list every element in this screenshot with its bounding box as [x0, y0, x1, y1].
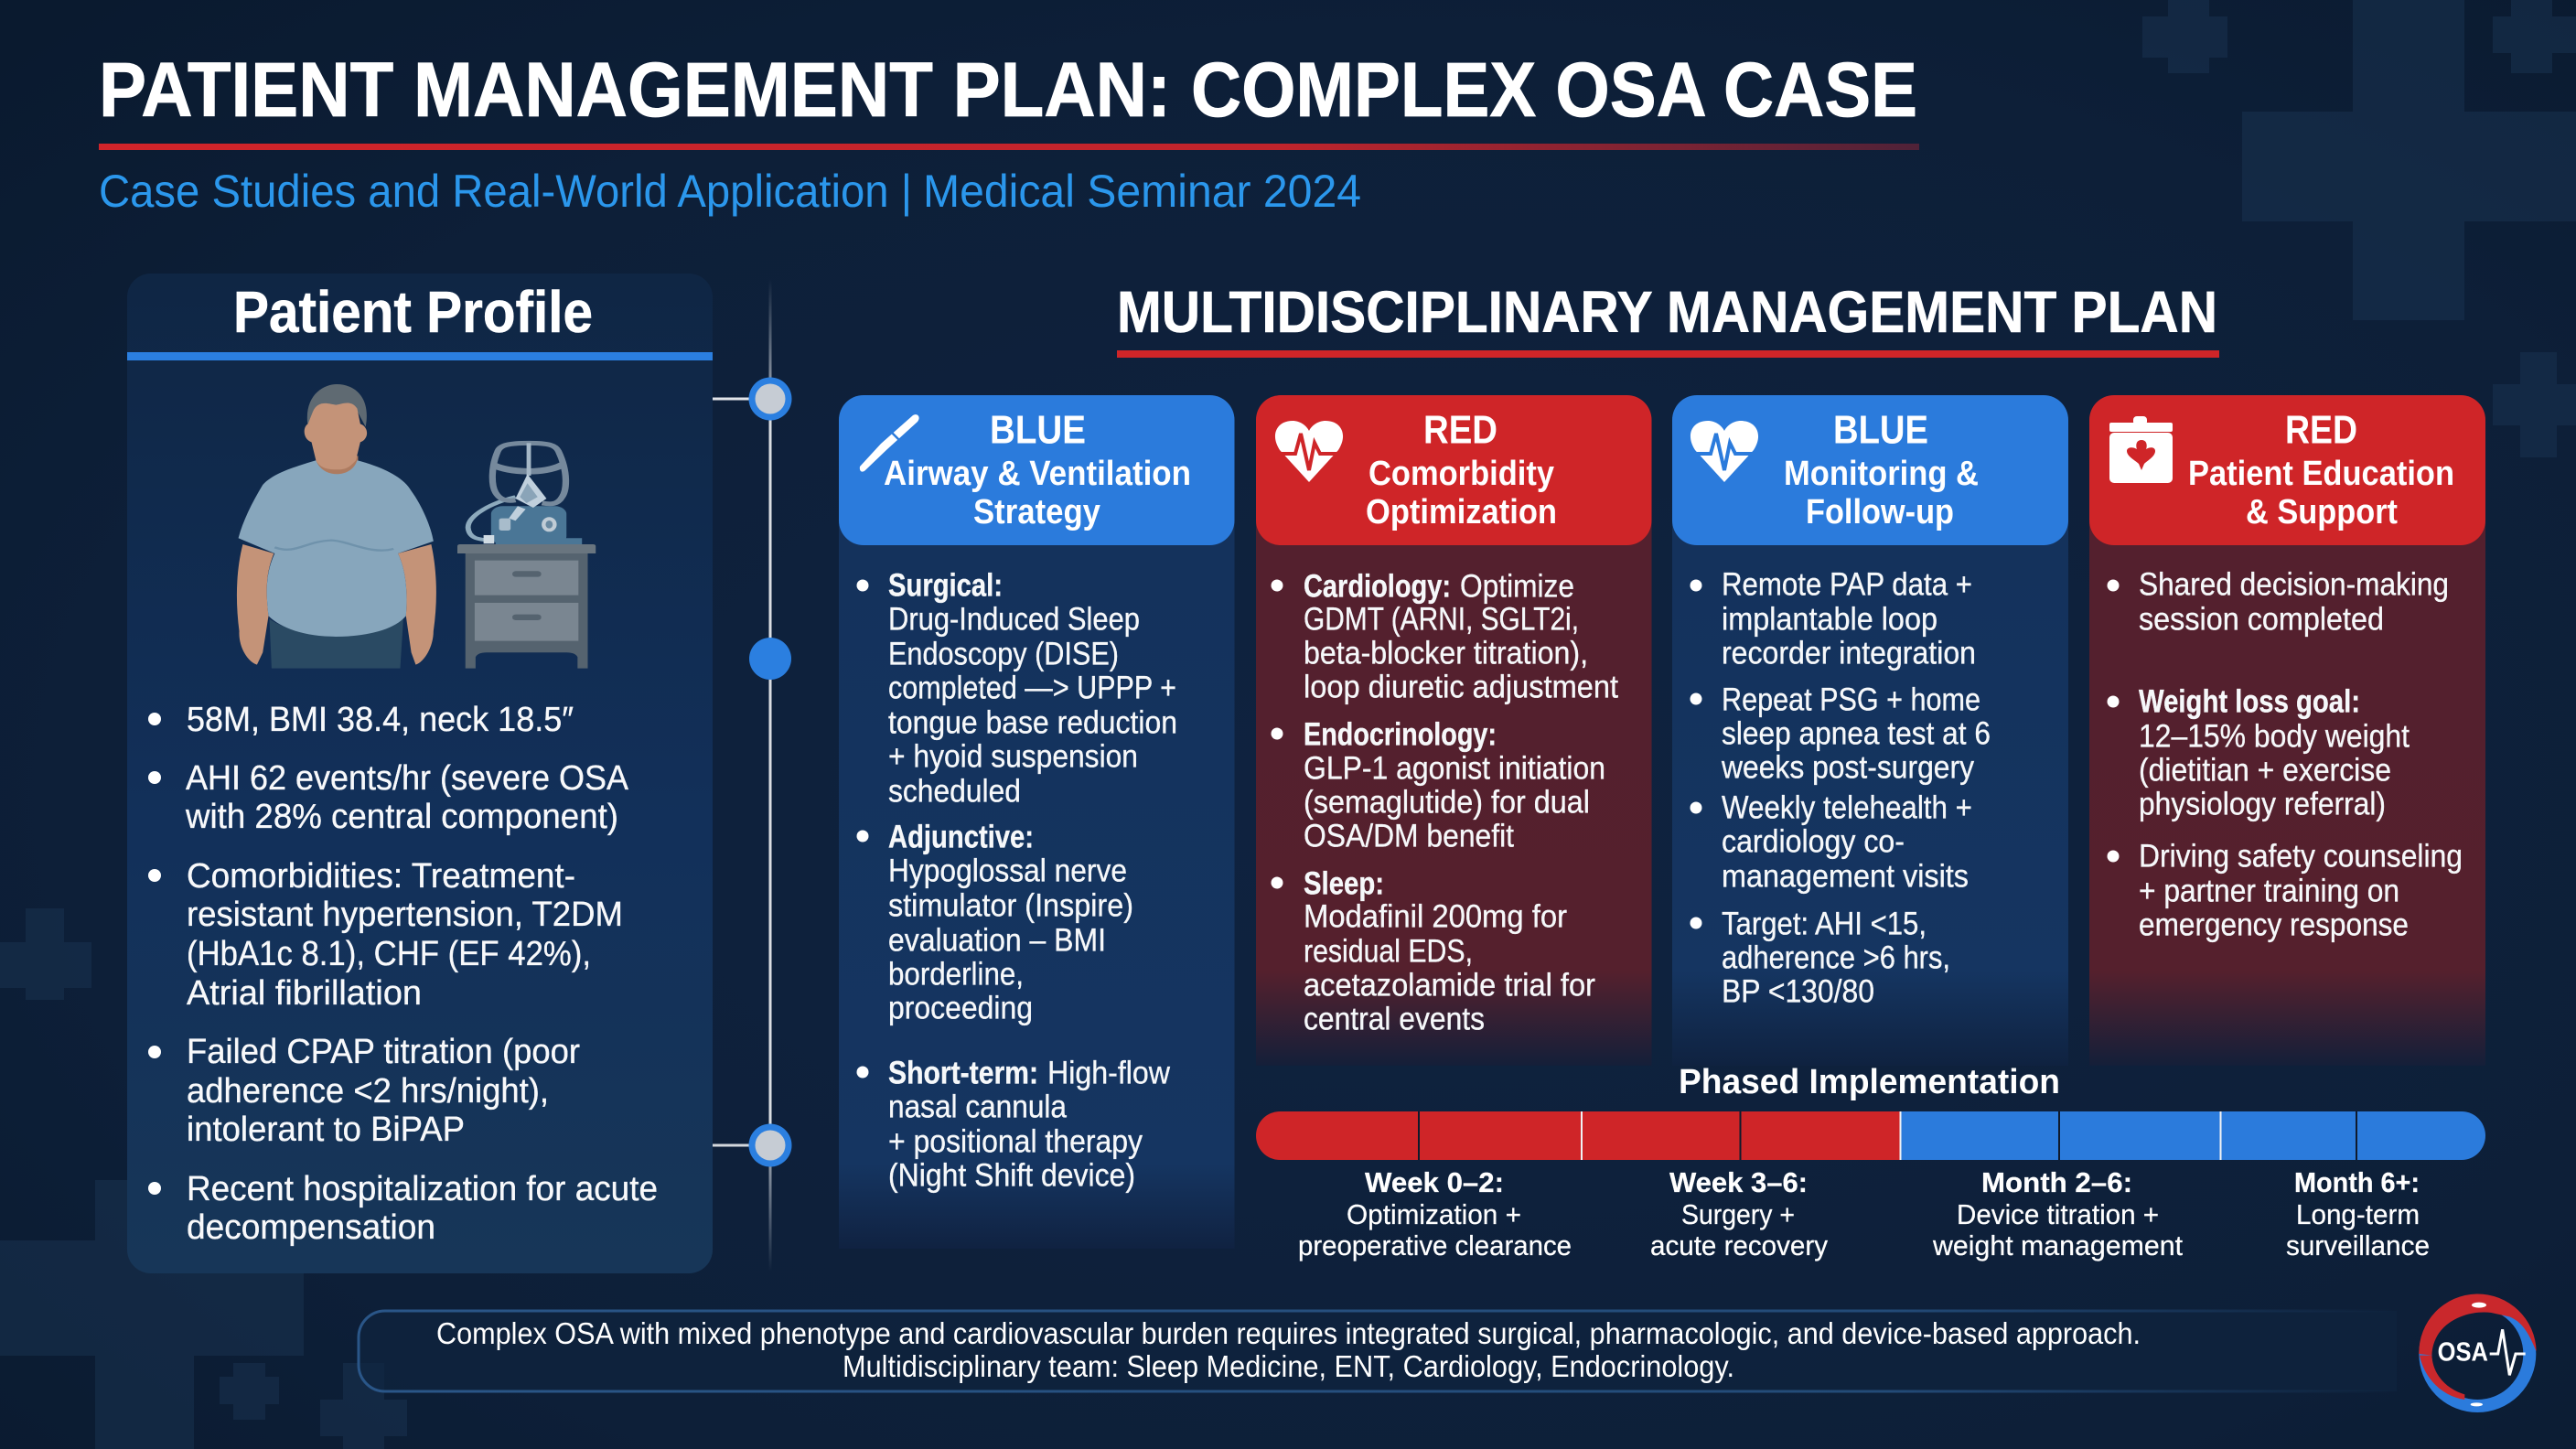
- bullet list: education: session completed: [2139, 602, 2384, 637]
- bullet list: patient facts: Atrial fibrillation: [187, 974, 422, 1013]
- bullet list: comorbidity: Optimize: [1460, 569, 1574, 604]
- bullet list: monitoring: BP <130/80: [1722, 973, 1874, 1010]
- heading: phased implementation: Phased Implementation: [1679, 1063, 2060, 1101]
- panel heading: Patient Profile: [233, 279, 593, 345]
- bullet list: comorbidity: Sleep:: [1304, 865, 1384, 902]
- bullet list: airway: Adjunctive:: [888, 820, 1034, 854]
- card header: [839, 395, 1235, 545]
- bullet list: patient facts: resistant hypertension, T2DM: [187, 896, 623, 934]
- bullet list: comorbidity: (semaglutide) for dual: [1304, 785, 1590, 820]
- bullet list: patient facts: adherence <2 hrs/night),: [187, 1072, 549, 1111]
- card title: BLUE: [1833, 408, 1928, 452]
- bullet list: comorbidity: GLP-1 agonist initiation: [1304, 750, 1605, 787]
- bullet list: comorbidity: loop diuretic adjustment: [1304, 670, 1618, 704]
- phase label: week 0-2: Optimization +: [1347, 1198, 1521, 1230]
- bullet list: education: Shared decision-making: [2139, 567, 2449, 602]
- panel: monitoring and follow-up: [1672, 395, 2068, 1066]
- card title: Follow-up: [1806, 493, 1954, 531]
- bullet list: comorbidity: beta-blocker titration),: [1304, 635, 1588, 671]
- bullet list: monitoring: Repeat PSG + home: [1722, 682, 1980, 717]
- bullet list: monitoring: recorder integration: [1722, 635, 1976, 671]
- card title: Patient Education: [2188, 455, 2454, 493]
- bullet list: airway: tongue base reduction: [888, 704, 1177, 741]
- card header: [2089, 395, 2485, 545]
- phase label: week 3-6: [1650, 1166, 1828, 1261]
- bullet list: patient facts: intolerant to BiPAP: [187, 1111, 465, 1149]
- bullet list: airway: Surgical:: [888, 567, 1003, 604]
- bullet list: monitoring: cardiology co-: [1722, 823, 1905, 860]
- icon: heart with pulse: [1690, 421, 1758, 482]
- bullet list: airway: scheduled: [888, 774, 1021, 809]
- panel: airway and ventilation: [839, 395, 1235, 1249]
- bullet list: patient facts: decompensation: [187, 1208, 435, 1247]
- bullet list: comorbidity: Endocrinology:: [1304, 717, 1497, 752]
- panel: patient education and support: [2089, 395, 2485, 1066]
- bullet list: monitoring: sleep apnea test at 6: [1722, 715, 1991, 752]
- card body: [839, 521, 1235, 1249]
- title: COMPLEX OSA CASE: [1191, 47, 1917, 133]
- phased timeline bar: [1256, 1111, 2485, 1160]
- card title: Strategy: [973, 493, 1100, 531]
- bullet list: education: emergency response: [2139, 907, 2409, 942]
- phase label: month 6+: surveillance: [2286, 1229, 2430, 1261]
- card header: [1672, 395, 2068, 545]
- phase label: month 2-6: Month 2–6:: [1981, 1166, 2132, 1198]
- phase label: month 6+: Month 6+:: [2294, 1166, 2420, 1198]
- bullet list: comorbidity: Cardiology:: [1304, 569, 1451, 604]
- bullet list: airway: + hyoid suspension: [888, 739, 1138, 774]
- bullet list: airway: nasal cannula: [888, 1089, 1067, 1125]
- bullet list: airway: Drug-Induced Sleep: [888, 602, 1140, 637]
- bullet list: comorbidity: central events: [1304, 1001, 1485, 1037]
- bullet list: monitoring: Target: AHI <15,: [1722, 906, 1927, 942]
- footer summary callout: [359, 1311, 2397, 1391]
- bullet list: patient facts: 58M, BMI 38.4, neck 18.5″: [187, 701, 574, 739]
- title: [99, 47, 1917, 133]
- phase label: week 0-2: preoperative clearance: [1298, 1229, 1572, 1261]
- bullet list: monitoring: weeks post-surgery: [1721, 750, 1974, 785]
- card title: RED: [2285, 408, 2357, 452]
- bullet list: monitoring: management visits: [1722, 858, 1969, 895]
- card header: [1256, 395, 1652, 545]
- bullet list: patient facts: Recent hospitalization for acute: [187, 1170, 658, 1208]
- heading: multidisciplinary plan: MULTIDISCIPLINARY MANAGEMENT PLAN: [1117, 279, 2217, 345]
- bullet list: patient facts: Comorbidities: Treatment-: [187, 857, 575, 896]
- subtitle: [99, 166, 1361, 217]
- phase label: month 2-6: weight management: [1932, 1229, 2183, 1261]
- bullet list: airway: Short-term:: [888, 1056, 1038, 1090]
- phase label: week 0-2: [1298, 1166, 1572, 1261]
- bullet list: education: Driving safety counseling: [2139, 838, 2463, 875]
- icon: heart with pulse: [1275, 421, 1343, 482]
- bullet list: monitoring: [1690, 567, 1991, 1010]
- bullet list: airway: + positional therapy: [888, 1123, 1143, 1160]
- phase label: month 6+: Long-term: [2296, 1198, 2420, 1230]
- icon: scalpel: [860, 414, 919, 472]
- card title: & Support: [2246, 493, 2398, 531]
- bullet list: comorbidity: acetazolamide trial for: [1304, 968, 1595, 1003]
- bullet list: patient facts: [148, 701, 658, 1247]
- phase label: week 0-2: Week 0–2:: [1365, 1166, 1504, 1198]
- bullet list: airway: High-flow: [1047, 1056, 1171, 1090]
- bullet list: monitoring: adherence >6 hrs,: [1722, 940, 1950, 975]
- phase label: month 6+: [2286, 1166, 2430, 1261]
- card title: Comorbidity: [1368, 455, 1554, 493]
- illustration: patient with CPAP on nightstand: [237, 384, 596, 669]
- bullet list: airway: evaluation – BMI: [888, 922, 1106, 959]
- phase label: week 3-6: acute recovery: [1650, 1229, 1828, 1261]
- footer summary callout: Complex OSA with mixed phenotype and cardiovascular burden requires integrated surgical, pharmacologic, and device-based approach.: [436, 1316, 2141, 1350]
- phase label: month 2-6: [1932, 1166, 2183, 1261]
- phase label: month 2-6: Device titration +: [1957, 1198, 2159, 1230]
- logo: OSA ring: [2419, 1294, 2537, 1406]
- footer summary callout: Multidisciplinary team: Sleep Medicine, ENT, Cardiology, Endocrinology.: [843, 1349, 1734, 1383]
- bullet list: airway: completed —> UPPP +: [888, 670, 1176, 706]
- card body: [2089, 521, 2485, 1066]
- bullet list: airway: [856, 567, 1177, 1193]
- card title: [1366, 408, 1557, 531]
- bullet list: comorbidity: residual EDS,: [1304, 933, 1473, 970]
- card title: BLUE: [990, 408, 1086, 452]
- bullet list: comorbidity: OSA/DM benefit: [1304, 818, 1514, 854]
- card title: [884, 408, 1191, 531]
- bullet list: airway: Endoscopy (DISE): [888, 637, 1119, 671]
- bullet list: monitoring: Weekly telehealth +: [1722, 790, 1972, 825]
- card title: Monitoring &: [1784, 455, 1979, 493]
- title: PATIENT MANAGEMENT PLAN:: [99, 47, 1171, 133]
- bullet list: monitoring: implantable loop: [1722, 602, 1937, 637]
- bullet list: comorbidity: GDMT (ARNI, SGLT2i,: [1304, 602, 1579, 637]
- bullet list: monitoring: Remote PAP data +: [1722, 567, 1972, 602]
- heading underline: [1117, 350, 2219, 358]
- bullet list: patient facts: (HbA1c 8.1), CHF (EF 42%),: [187, 935, 591, 973]
- subtitle: Medical Seminar 2024: [923, 166, 1361, 217]
- bullet list: education: physiology referral): [2139, 787, 2386, 821]
- card title: [2188, 408, 2454, 531]
- bullet list: comorbidity: Modafinil 200mg for: [1304, 898, 1567, 935]
- timeline connector with nodes: [713, 279, 792, 1272]
- card title: RED: [1423, 408, 1497, 452]
- bullet list: education: (dietitian + exercise: [2139, 752, 2391, 789]
- heading rule: [127, 352, 713, 360]
- card title: Airway & Ventilation: [884, 455, 1191, 493]
- bullet list: patient facts: AHI 62 events/hr (severe OSA: [186, 759, 629, 798]
- bullet list: education: [2108, 567, 2463, 942]
- bullet list: airway: borderline,: [888, 957, 1024, 992]
- panel background: [127, 274, 713, 1273]
- bullet list: airway: stimulator (Inspire): [888, 887, 1133, 924]
- logo: OSA ring: OSA: [2438, 1338, 2488, 1368]
- card title: [1784, 408, 1979, 531]
- bullet list: patient facts: with 28% central component): [185, 798, 618, 836]
- bullet list: education: 12–15% body weight: [2139, 719, 2410, 754]
- bullet list: airway: proceeding: [888, 990, 1033, 1026]
- bullet list: patient facts: Failed CPAP titration (poor: [187, 1033, 580, 1071]
- card body: [1256, 521, 1652, 1066]
- card title: Optimization: [1366, 493, 1557, 531]
- icon: clipboard with medical mark: [2109, 416, 2173, 483]
- bullet list: education: + partner training on: [2139, 873, 2399, 909]
- panel: patient profile: [127, 274, 713, 1273]
- title underline: [99, 144, 1919, 150]
- subtitle: Case Studies and Real-World Application |: [99, 166, 912, 217]
- bullet list: airway: (Night Shift device): [888, 1158, 1135, 1193]
- panel: comorbidity optimization: [1256, 395, 1652, 1066]
- card body: [1672, 521, 2068, 1066]
- bullet list: comorbidity: [1272, 569, 1618, 1037]
- phase label: week 3-6: Surgery +: [1681, 1198, 1795, 1230]
- phase label: week 3-6: Week 3–6:: [1669, 1166, 1808, 1198]
- bullet list: education: Weight loss goal:: [2139, 684, 2360, 719]
- bullet list: airway: Hypoglossal nerve: [888, 853, 1127, 889]
